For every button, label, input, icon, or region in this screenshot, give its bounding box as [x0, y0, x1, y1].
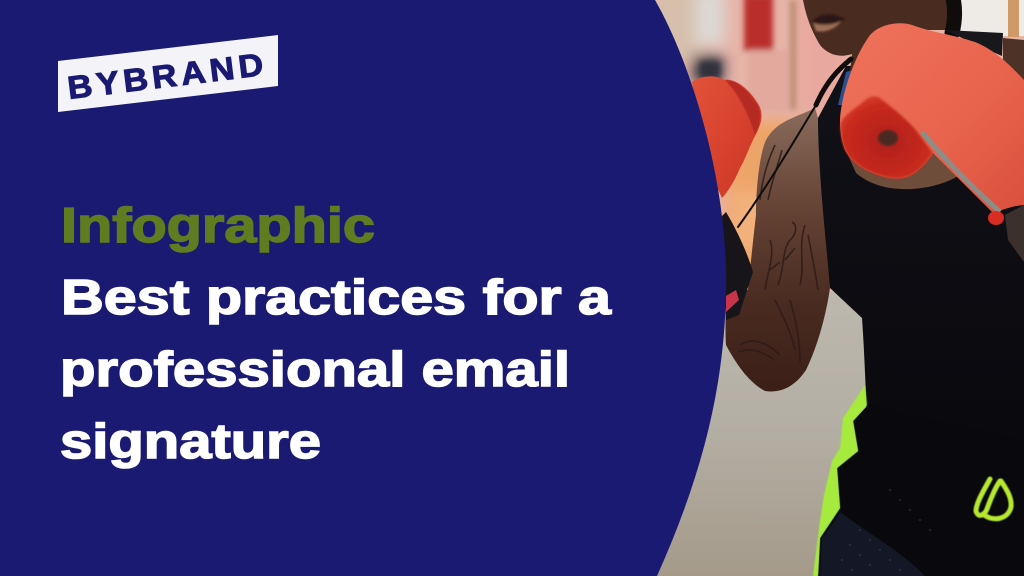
torso: black tank top [818, 60, 1024, 465]
headline label: Infographic: Infographic [61, 199, 375, 253]
small red boxing glove [692, 76, 762, 320]
lips [812, 14, 845, 32]
gym background [640, 0, 1024, 576]
chest skin above neckline [848, 150, 958, 189]
headline line 3: signature [60, 415, 321, 469]
navy curved panel [0, 0, 726, 576]
glove lace [922, 132, 1000, 212]
logo: Bybrand [58, 35, 278, 112]
neon green drawstring [976, 479, 1011, 519]
neon green shorts trim [813, 385, 867, 576]
photo: boxer with red gloves [640, 0, 1024, 576]
wrist wrap label [726, 290, 739, 312]
arm with tattoos [726, 108, 830, 391]
tattoos [738, 145, 818, 362]
far shoulder and strap [945, 30, 1024, 82]
glove cuff tag [988, 211, 1004, 225]
logo badge [58, 35, 278, 112]
glove cuff [1005, 205, 1024, 262]
logo wordmark: BYBRAND [65, 46, 269, 106]
wrist wrap [722, 212, 753, 320]
shorts [818, 405, 1024, 576]
shorts mesh dots [841, 489, 931, 571]
face and neck [803, 0, 952, 72]
blue bra strap [838, 70, 852, 105]
braided hair [738, 0, 955, 227]
headline line 2: professional email [60, 343, 570, 397]
large red boxing glove [840, 23, 1024, 262]
headline line 1: Best practices for a [61, 271, 612, 325]
glove thumb seam [878, 130, 898, 146]
headline [60, 199, 612, 469]
